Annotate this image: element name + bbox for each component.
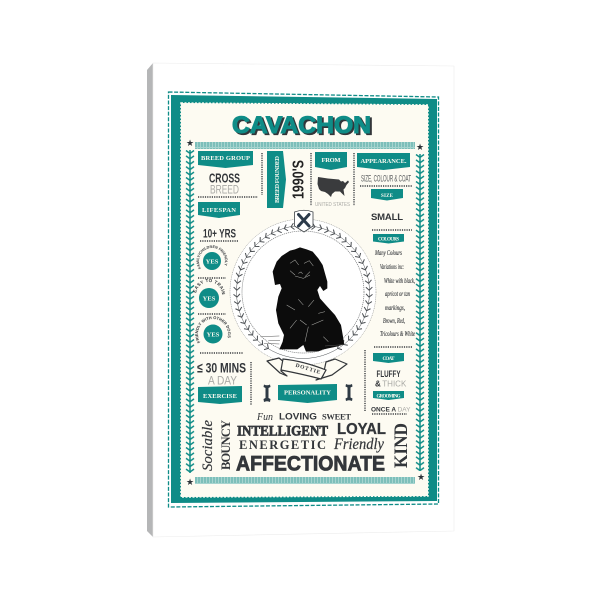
banner: coat: COAT — [382, 357, 395, 362]
banner: lifespan — [198, 202, 240, 218]
word: affectionate: AFFECTIONATE — [236, 452, 385, 476]
word: sociable: Sociable — [200, 420, 216, 471]
badge: easy to train — [193, 278, 226, 308]
cream inner panel — [181, 103, 428, 497]
panel: appearance — [357, 153, 415, 414]
word: fun: Fun — [256, 412, 273, 423]
icon: shield with crossed bones — [294, 210, 313, 232]
laurel wreath — [233, 223, 373, 358]
banner: lifespan: LIFESPAN — [202, 207, 236, 214]
panel: breed founded — [267, 151, 308, 208]
panel: lifespan and traits — [193, 202, 246, 404]
icon: USA map — [318, 177, 349, 197]
medallion — [230, 219, 376, 365]
colours list — [374, 249, 415, 338]
word: loyal: LOYAL — [337, 421, 386, 438]
text: small: SMALL — [371, 212, 403, 223]
badge: family friendly: YES — [206, 258, 219, 266]
outer ring — [230, 219, 376, 365]
word: intelligent: INTELLIGENT — [237, 424, 328, 440]
colours list: Many Colours — [374, 249, 402, 257]
banner: personality: PERSONALITY — [284, 390, 331, 396]
banner: appearance — [357, 153, 410, 170]
text: size colour coat: SIZE, COLOUR & COAT — [361, 174, 411, 184]
text: united states: UNITED STATES — [315, 202, 351, 208]
badge: friendly with other dogs: YES — [207, 332, 220, 338]
text: once a day: ONCE A DAY — [371, 406, 411, 414]
banner: breed group: BREED GROUP — [201, 155, 250, 162]
icon: left bone — [264, 384, 270, 402]
word: bouncy: BOUNCY — [219, 420, 233, 470]
title: CAVACHON — [232, 112, 371, 139]
text: 30 mins: ≤ 30 MINS — [197, 360, 246, 376]
inner ring — [242, 231, 364, 353]
badge: friendly with other dogs: FRIENDLY WITH OTHER DOGS — [195, 316, 231, 344]
banner: breed founded: BREED FOUNDED — [275, 155, 281, 203]
banner: exercise — [198, 386, 242, 404]
banner: from: FROM — [322, 157, 340, 164]
panel: breed group — [198, 151, 253, 196]
dashed outer border — [168, 92, 438, 507]
text: breed: BREED — [210, 182, 239, 196]
canvas front — [153, 63, 454, 537]
badge: easy to train: EASY TO TRAIN — [193, 278, 226, 294]
banner: size: SIZE — [381, 194, 394, 199]
star: bottom right: ★ — [417, 472, 425, 482]
text: fluffy: FLUFFY — [376, 369, 400, 379]
star: bottom left: ★ — [186, 477, 194, 487]
star: top right: ★ — [416, 142, 424, 152]
badge: easy to train: YES — [203, 296, 216, 302]
left chevron column — [186, 150, 194, 473]
word: kind: KIND — [391, 423, 412, 468]
colours list: Tricolours & White — [380, 330, 415, 338]
star: top left: ★ — [186, 138, 194, 148]
teal frame — [171, 95, 437, 503]
text: and thick: &THICK — [375, 380, 407, 388]
colours list: markings, — [385, 304, 405, 312]
word: sweet: SWEET — [322, 412, 351, 422]
canvas side edge — [147, 63, 153, 537]
banner: coat — [373, 353, 404, 363]
badge: family friendly: FAMILY/CHILDREN FRIENDLY — [196, 245, 228, 270]
title: CAVACHON — [234, 114, 373, 140]
ribbon: dottie — [266, 357, 348, 381]
banner: size — [371, 189, 403, 200]
top decorative strip — [195, 142, 415, 149]
colours list: Variations inc: — [380, 263, 404, 271]
icon: right bone — [346, 384, 352, 401]
banner: colours — [373, 234, 404, 244]
banner: grooming: GROOMING — [376, 394, 401, 400]
banner: appearance: APPEARANCE. — [360, 158, 407, 165]
colours list: White with black, — [384, 277, 415, 285]
word: energetic: ENERGETIC — [239, 438, 326, 452]
panel: personality word cloud — [200, 412, 412, 476]
text: a day: A DAY — [208, 374, 237, 388]
colours list: Brown, Red, — [383, 317, 405, 325]
banner: colours: COLOURS — [378, 238, 399, 242]
right chevron column — [416, 154, 424, 471]
ribbon: dottie: DOTTIE — [295, 363, 320, 374]
text: 10+ yrs: 10+ YRS — [203, 226, 236, 240]
text: 1990's: 1990'S — [290, 160, 308, 199]
banner: personality — [278, 384, 337, 403]
banner: exercise: EXERCISE — [203, 393, 237, 400]
banner: grooming — [373, 391, 404, 400]
colours list: apricot or tan — [385, 290, 410, 298]
icon: dog silhouette — [261, 247, 344, 352]
word: loving: LOVING — [279, 412, 317, 422]
word: friendly: Friendly — [333, 436, 384, 453]
panel: from — [315, 152, 351, 208]
bottom decorative strip — [195, 477, 415, 484]
text: cross: CROSS — [209, 172, 240, 186]
